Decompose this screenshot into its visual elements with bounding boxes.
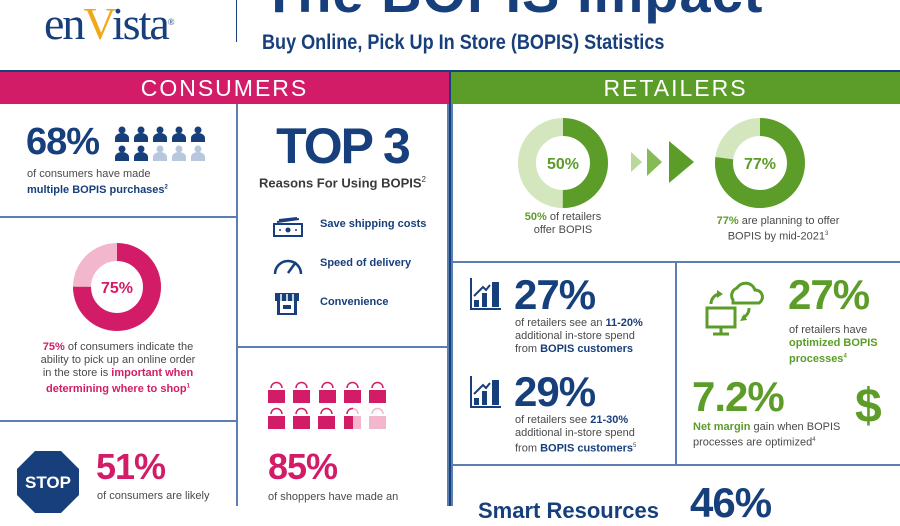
caption <box>27 168 168 196</box>
caption 50%: offer BOPIS <box>534 224 592 236</box>
reason: convenience: Convenience <box>320 296 388 308</box>
caption: of shoppers have made an <box>268 491 398 503</box>
icon: people <box>115 126 205 161</box>
caption: multiple BOPIS purchases2 <box>27 184 168 196</box>
caption: of retailers have <box>789 324 867 336</box>
donut chart 77%: 77% <box>744 156 776 173</box>
caption <box>41 341 196 395</box>
donut chart 77% <box>715 118 805 208</box>
subtitle: Buy Online, Pick Up In Store (BOPIS) Statistics <box>262 31 664 54</box>
icon: stop sign: STOP <box>25 473 71 492</box>
icon: speedometer <box>274 260 302 274</box>
caption <box>693 421 840 449</box>
reason: save shipping <box>273 217 426 237</box>
caption 77%: 77% are planning to offer <box>717 215 839 227</box>
band: consumers <box>0 72 449 104</box>
reason: speed <box>274 257 411 274</box>
stat 27%: 27% <box>788 271 869 318</box>
icon: bar chart 1 <box>470 278 501 310</box>
panel: 75% donut <box>41 243 196 395</box>
caption <box>789 324 878 365</box>
icon: money <box>273 217 303 237</box>
caption: processes4 <box>789 353 847 365</box>
panel: 51% stop <box>17 446 210 513</box>
icon: cloud sync <box>706 282 764 336</box>
panel: in-store spend <box>470 271 643 455</box>
caption: additional in-store spend <box>515 427 635 439</box>
icon: stop sign <box>17 451 79 513</box>
heading TOP 3: TOP 3 <box>276 118 409 174</box>
stat 51%: 51% <box>96 446 165 487</box>
caption: from BOPIS customers <box>515 343 633 355</box>
arrows <box>631 141 694 183</box>
caption: of consumers have made <box>27 168 151 180</box>
reason: convenience <box>275 293 388 315</box>
icon: dollar: $ <box>855 380 882 433</box>
caption: determining where to shop1 <box>46 383 190 395</box>
caption: of consumers are likely <box>97 490 210 502</box>
stat 68%: 68% <box>26 121 99 163</box>
caption: of retailers see 21-30% <box>515 414 628 426</box>
icon: bar chart 2 <box>470 376 501 408</box>
stat 46%: 46% <box>690 479 771 526</box>
caption: 75% of consumers indicate the <box>43 341 193 353</box>
caption: of retailers see an 11-20% <box>515 317 643 329</box>
panel: 68% <box>26 121 205 196</box>
donut chart 75%: 75% <box>101 280 133 297</box>
stat 85%: 85% <box>268 446 337 487</box>
panel: 46% bottom <box>478 479 771 526</box>
caption 50%: 50% of retailers <box>525 211 601 223</box>
caption 50% <box>525 211 601 236</box>
reason: speed: Speed of delivery <box>320 257 411 269</box>
caption 77% <box>717 215 840 243</box>
band: retailers <box>451 72 900 104</box>
donut chart 50% <box>518 118 608 208</box>
icon: store <box>275 293 299 315</box>
grid lines <box>0 70 900 72</box>
caption <box>515 317 643 355</box>
panel: optimized <box>692 271 882 449</box>
band: retailers: RETAILERS <box>603 75 748 101</box>
stat 7.2%: 7.2% <box>692 373 784 420</box>
text: smart resources: Smart Resources <box>478 498 659 523</box>
caption: ability to pick up an online order <box>41 354 195 366</box>
donut chart 50%: 50% <box>547 156 579 173</box>
caption: processes are optimized4 <box>693 437 816 449</box>
panel: top 3 reasons <box>259 118 426 315</box>
caption <box>515 414 636 455</box>
icon: bags <box>268 382 386 429</box>
panel: retailer donuts <box>518 118 840 243</box>
stat 27%: 27% <box>514 271 595 318</box>
panel: 85% bags <box>268 382 398 503</box>
donut chart 75% <box>73 243 161 331</box>
band: consumers: CONSUMERS <box>141 75 308 101</box>
caption: optimized BOPIS <box>789 337 878 349</box>
caption: additional in-store spend <box>515 330 635 342</box>
caption: from BOPIS customers5 <box>515 443 636 455</box>
stat 29%: 29% <box>514 368 595 415</box>
header divider <box>236 0 237 42</box>
subheading: Reasons For Using BOPIS2 <box>259 175 426 190</box>
caption: Net margin gain when BOPIS <box>693 421 840 433</box>
caption: in the store is important when <box>43 367 193 379</box>
caption 77%: BOPIS by mid-20213 <box>728 231 828 243</box>
reason: save shipping: Save shipping costs <box>320 218 426 230</box>
